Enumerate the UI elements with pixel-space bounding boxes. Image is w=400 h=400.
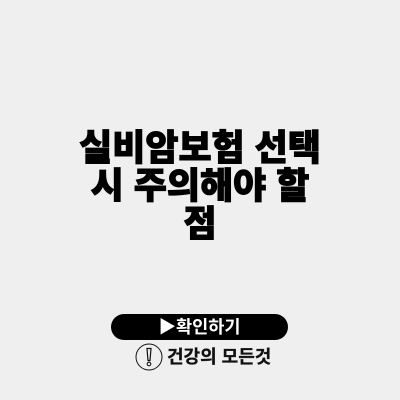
button: confirm: ▶확인하기 [159,317,240,337]
icon: exclamation circle [136,344,162,370]
caption: 건강의 모든것 [167,347,271,367]
title [79,127,321,244]
button: confirm [111,314,288,340]
title: 시 주의해야 할 [91,165,309,206]
title: 실비암보험 선택 [79,127,321,168]
title: 점 [183,203,217,244]
